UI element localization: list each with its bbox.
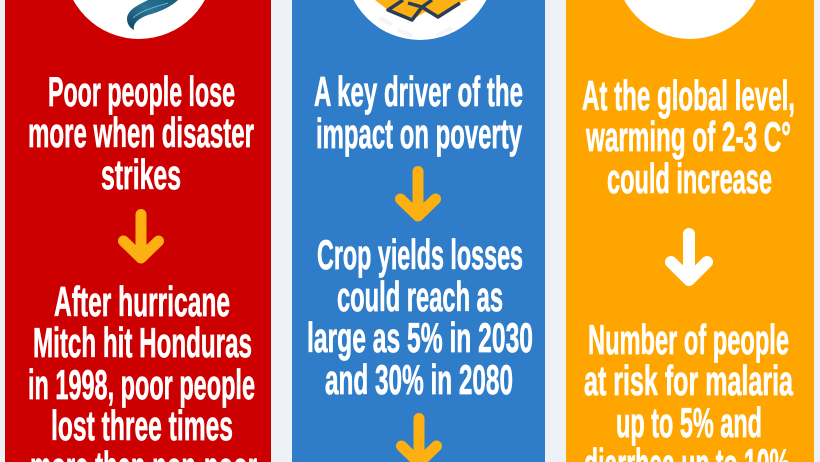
text: disasters heading xyxy=(28,68,254,198)
arrow: disasters xyxy=(124,214,158,258)
text: disasters heading: Poor people lose xyxy=(48,68,235,115)
text: hurricane Mitch: After hurricane xyxy=(54,278,230,325)
text: crop yields: and 30% in 2080 xyxy=(325,356,513,403)
text: malaria and diarrhea xyxy=(584,316,794,462)
arrow: agriculture 1 xyxy=(400,172,436,216)
text: agriculture heading: A key driver of the xyxy=(314,68,523,115)
text: disasters heading: more when disaster xyxy=(28,109,254,156)
text: crop yields: Crop yields losses xyxy=(317,231,523,278)
panel: agriculture xyxy=(292,0,545,462)
text: hurricane Mitch: in 1998, poor people xyxy=(28,361,255,408)
text: crop yields: large as 5% in 2030 xyxy=(307,314,533,361)
text: hurricane Mitch: lost three times xyxy=(51,402,233,449)
text: crop yields xyxy=(307,231,533,403)
icon: white circle xyxy=(615,0,765,39)
panel: health xyxy=(566,0,814,462)
icon: crop grid in white circle xyxy=(345,0,495,40)
text: hurricane Mitch xyxy=(28,278,257,462)
text: health heading xyxy=(582,72,795,202)
panel: disasters xyxy=(5,0,271,462)
arrow: health xyxy=(671,234,707,280)
icon: wave in white circle xyxy=(64,0,214,39)
text: disasters heading: strikes xyxy=(101,151,181,198)
text: crop yields: could reach as xyxy=(337,273,503,320)
text: hurricane Mitch: Mitch hit Honduras xyxy=(33,319,252,366)
text: agriculture heading xyxy=(314,68,523,157)
text: agriculture heading: impact on poverty xyxy=(316,110,522,157)
arrow: agriculture 2 xyxy=(402,418,436,462)
